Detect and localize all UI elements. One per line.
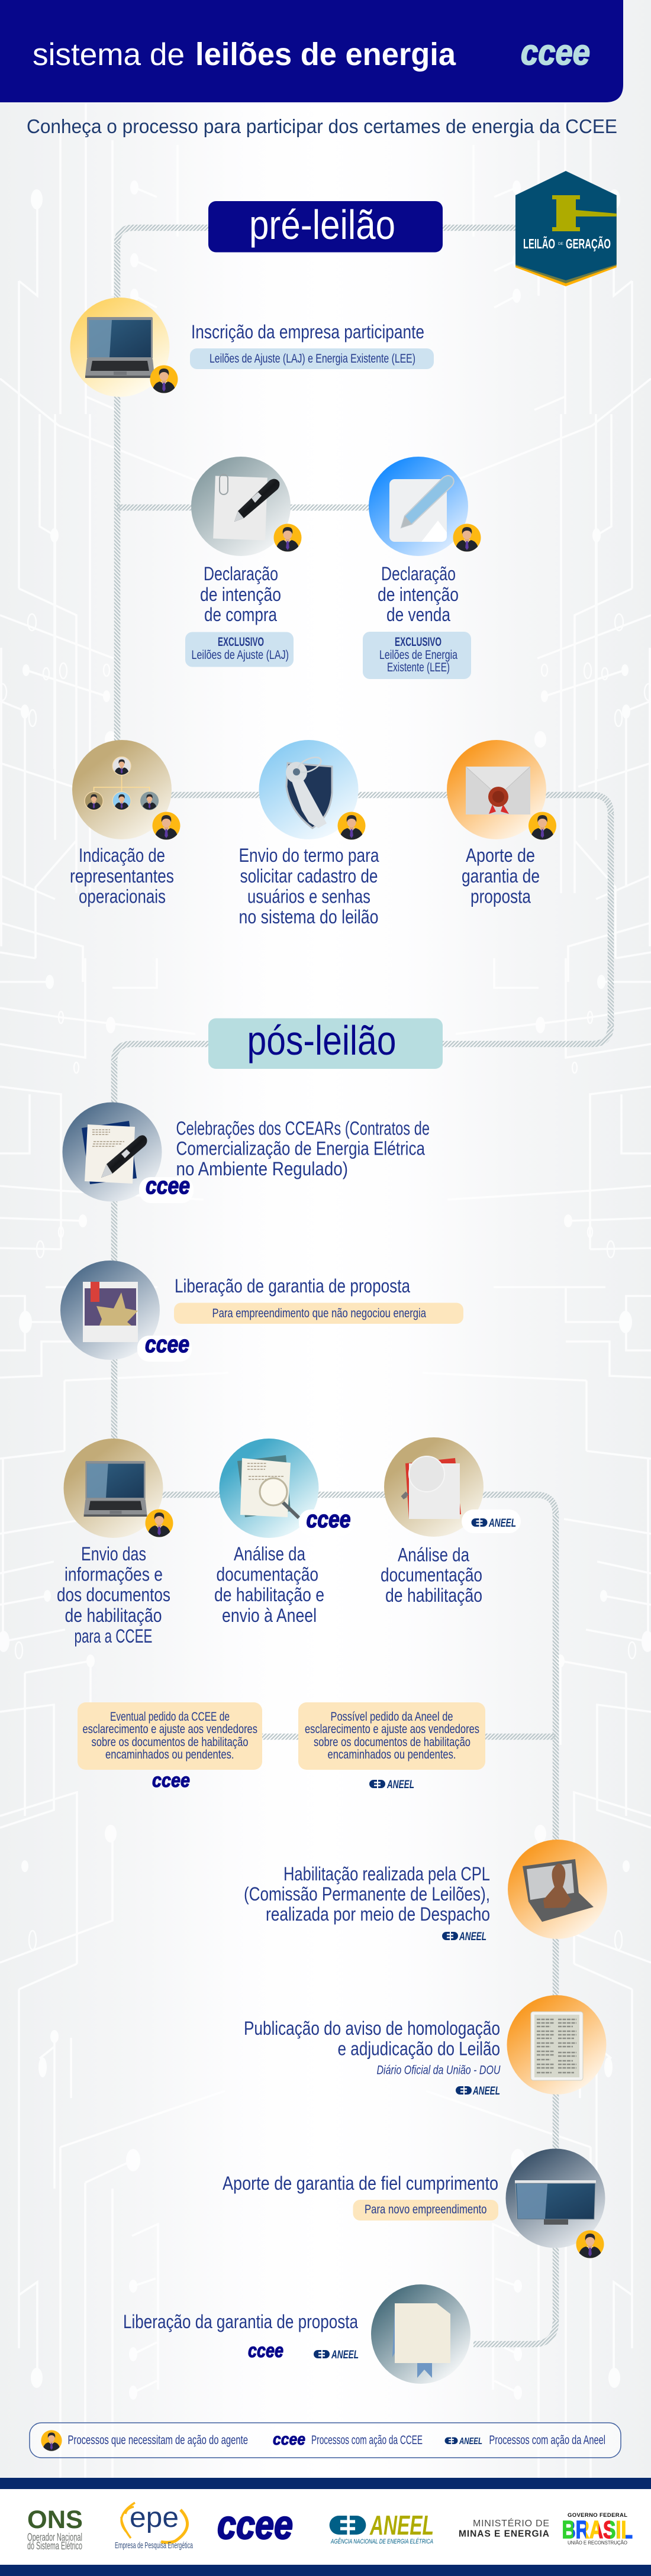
logo: EPE	[115, 2502, 193, 2551]
step: envio das informações	[57, 1439, 173, 1647]
label: Declaração	[204, 563, 278, 584]
step: declaração de venda: EXCLUSIVO	[395, 635, 441, 649]
logo: aneel	[462, 1510, 521, 1533]
icon: agent	[528, 812, 556, 840]
header banner	[0, 0, 623, 102]
step: aporte de garantia de proposta: proposta	[470, 886, 531, 907]
logo: ONS: Operador Nacional	[27, 2532, 82, 2543]
logo: Ministério	[459, 2517, 549, 2539]
step: aporte de fiel cumprimento: Para novo empreendimento	[365, 2203, 486, 2216]
logo: Ministério: MINAS E ENERGIA	[459, 2529, 549, 2539]
icon: key and shield	[286, 754, 332, 828]
icon: agent	[146, 1510, 173, 1537]
step: análise Aneel	[381, 1437, 521, 1606]
title: sistema de	[33, 37, 185, 72]
callout: pedido da CCEE: sobre os documentos de habilitação	[91, 1735, 249, 1749]
step: liberação de garantia: Para empreendimento que não negociou energia	[212, 1307, 426, 1320]
label: Habilitação realizada pela CPL	[283, 1863, 490, 1885]
legend item: agente: Processos que necessitam de ação do agente	[67, 2433, 248, 2447]
label: Análise da	[234, 1543, 305, 1565]
subtitle: Conheça o processo para participar dos certames de energia da CCEE	[27, 115, 617, 137]
heading: pré-leilão	[208, 201, 443, 252]
icon: agent	[453, 524, 481, 552]
step: declaração de venda: Existente (LEE)	[387, 661, 450, 674]
step: declaração de venda: Leilões de Energia	[379, 648, 457, 662]
logo: aneel	[442, 1930, 486, 1943]
step: inscrição	[70, 298, 434, 397]
logo: ccee: ccee	[152, 1769, 190, 1791]
step: envio do termo: usuários e senhas	[247, 886, 370, 907]
step: declaração de venda	[363, 457, 481, 679]
step: análise e envio à Aneel: de habilitação e	[214, 1584, 324, 1605]
icon: sealed envelope	[466, 767, 530, 815]
logo: Governo Federal: GOVERNO FEDERAL	[568, 2512, 627, 2519]
logo: ccee	[137, 1331, 192, 1362]
logo: EPE: epe	[130, 2502, 179, 2533]
step: inscrição: Leilões de Ajuste (LAJ) e Energia Existente (LEE)	[210, 352, 415, 366]
heading: pós-leilão: pós-leilão	[247, 1017, 397, 1064]
icon: org chart	[85, 757, 159, 810]
connector lines	[114, 228, 611, 2344]
step: envio das informações: dos documentos	[57, 1584, 170, 1605]
callout: pedido da CCEE: encaminhados ou pendentes.	[105, 1748, 234, 1761]
step: declaração de compra	[185, 457, 302, 667]
callout: pedido da Aneel: sobre os documentos de habilitação	[314, 1735, 470, 1749]
footer	[0, 2478, 651, 2576]
step: indicação de representantes: operacionais	[79, 886, 166, 907]
icon: agent	[337, 812, 366, 840]
logo: ONS: ONS	[27, 2506, 83, 2534]
step: aporte de garantia de proposta	[447, 740, 556, 907]
legend item: CCEE: ccee	[273, 2430, 305, 2448]
note pill	[363, 632, 471, 679]
label: Indicação de	[79, 845, 165, 866]
logo: ONS	[27, 2506, 83, 2552]
logo: aneel	[456, 2084, 500, 2097]
note pill	[174, 1302, 463, 1324]
badge: leilão de geração: GERAÇÃO	[566, 235, 611, 251]
icon: agent	[273, 524, 302, 552]
logo: ccee header: ccee	[521, 33, 590, 72]
step: análise e envio à Aneel: documentação	[217, 1564, 318, 1585]
logo: Ministério: MINISTÉRIO DE	[473, 2517, 549, 2529]
icon: paper and pen	[213, 474, 279, 541]
icon: agent	[150, 366, 178, 393]
logo: aneel	[369, 1778, 414, 1791]
icon: stamp	[523, 1859, 594, 1922]
legend	[30, 2423, 621, 2458]
heading: pré-leilão: pré-leilão	[249, 202, 395, 248]
step: aporte de fiel cumprimento	[223, 2148, 605, 2258]
logo: EPE: Empresa de Pesquisa Energética	[115, 2541, 193, 2551]
step: declaração de compra: Leilões de Ajuste (LAJ)	[192, 648, 289, 662]
legend item: agente	[41, 2430, 248, 2451]
icon: monitor	[515, 2180, 596, 2225]
icon: document and magnifier	[237, 1455, 299, 1518]
logo: ccee: ccee	[248, 2339, 283, 2361]
logo: aneel: ANEEL	[386, 1778, 414, 1791]
step: indicação de representantes	[70, 740, 180, 907]
icon: contract and pen	[82, 1121, 147, 1184]
label: Envio do termo para	[239, 845, 379, 866]
step: aporte de garantia de proposta: garantia de	[462, 865, 540, 887]
logo: aneel: ANEEL	[472, 2084, 500, 2097]
step: envio do termo	[239, 740, 379, 927]
icon: document and magnifier	[402, 1456, 461, 1519]
logo: Governo Federal: UNIÃO E RECONSTRUÇÃO	[568, 2540, 627, 2546]
callout: pedido da Aneel: esclarecimento e ajuste aos vendedores	[305, 1722, 479, 1736]
step: declaração de venda: de intenção	[378, 584, 459, 605]
logo: ANEEL	[330, 2510, 434, 2545]
label: Liberação da garantia de proposta	[123, 2311, 358, 2332]
badge: leilão de geração: DE	[558, 243, 563, 246]
step: declaração de venda: de venda	[386, 604, 450, 625]
label: Declaração	[381, 563, 456, 584]
note pill	[353, 2200, 498, 2221]
step: publicação: e adjudicação do Leilão	[337, 2038, 500, 2060]
note pill	[190, 348, 434, 369]
logo: aneel: ANEEL	[459, 1930, 486, 1943]
label: Análise da	[398, 1544, 469, 1565]
step: celebrações dos CCEARs	[63, 1103, 430, 1203]
step: análise Aneel: documentação	[381, 1564, 482, 1585]
step: declaração de compra: de compra	[204, 604, 277, 625]
label: Inscrição da empresa participante	[191, 321, 424, 342]
step: análise e envio à Aneel	[214, 1439, 353, 1626]
logo: CCEE: ccee	[217, 2502, 293, 2548]
step: liberação de garantia	[60, 1260, 463, 1362]
step: declaração de compra: EXCLUSIVO	[218, 635, 264, 649]
label: Aporte de garantia de fiel cumprimento	[223, 2173, 498, 2194]
callout: pedido da Aneel: Possível pedido da Aneel de	[330, 1710, 453, 1724]
logo: Governo Federal	[562, 2512, 633, 2546]
step: liberação da garantia	[123, 2284, 470, 2384]
step: publicação	[244, 1995, 606, 2097]
step: habilitação: (Comissão Permanente de Leilões),	[244, 1883, 490, 1905]
step: habilitação	[244, 1840, 607, 1943]
legend item: CCEE	[273, 2430, 423, 2448]
logo: aneel: ANEEL	[331, 2348, 359, 2361]
logo: ccee: ccee	[146, 1173, 190, 1199]
step: habilitação: realizada por meio de Despacho	[266, 1903, 490, 1925]
logo: ONS: do Sistema Elétrico	[27, 2540, 82, 2552]
step: envio das informações: para a CCEE	[75, 1625, 153, 1647]
icon: laptop	[84, 1461, 147, 1517]
step: análise e envio à Aneel: envio à Aneel	[222, 1605, 317, 1626]
legend item: Aneel: ANEEL	[459, 2436, 482, 2446]
heading: pós-leilão	[208, 1017, 443, 1069]
icon: agent	[576, 2230, 604, 2258]
step: indicação de representantes: representantes	[70, 865, 174, 887]
step: envio das informações: informações e	[65, 1564, 163, 1585]
badge: leilão de geração	[515, 171, 617, 286]
icon: gavel	[552, 195, 617, 231]
icon: newspaper	[531, 2012, 583, 2080]
icon: laptop	[85, 317, 154, 378]
label: Liberação de garantia de proposta	[175, 1275, 410, 1297]
callout: pedido da CCEE	[78, 1702, 262, 1791]
callout: pedido da CCEE: Eventual pedido da CCEE de	[110, 1710, 230, 1724]
logo: aneel: ANEEL	[488, 1517, 516, 1530]
label: Celebrações dos CCEARs (Contratos de	[176, 1118, 430, 1139]
icon: agent	[153, 812, 180, 840]
callout: pedido da Aneel: encaminhados ou pendentes.	[328, 1748, 456, 1761]
step: declaração de compra: de intenção	[200, 584, 281, 605]
step: análise Aneel: de habilitação	[385, 1585, 482, 1606]
label: Aporte de	[466, 845, 535, 866]
logo: ANEEL: AGÊNCIA NACIONAL DE ENERGIA ELÉTRICA	[330, 2538, 433, 2545]
step: envio do termo: solicitar cadastro de	[240, 865, 378, 887]
step: celebrações dos CCEARs: no Ambiente Regulado)	[176, 1158, 348, 1179]
badge: leilão de geração: LEILÃO	[523, 235, 555, 251]
step: envio do termo: no sistema do leilão	[239, 906, 379, 927]
icon: box with star	[83, 1282, 138, 1342]
callout: pedido da CCEE: esclarecimento e ajuste aos vendedores	[83, 1722, 257, 1736]
icon: certificate	[392, 2303, 450, 2378]
icon: notebook and pen	[389, 476, 454, 542]
logo: aneel	[314, 2348, 359, 2361]
label: Publicação do aviso de homologação	[244, 2018, 500, 2039]
source note: Diário Oficial da União - DOU	[376, 2063, 501, 2077]
step: envio das informações: de habilitação	[65, 1605, 162, 1626]
label: Envio das	[81, 1543, 146, 1565]
legend item: Aneel	[445, 2433, 605, 2447]
header banner: leilões de energia	[195, 37, 456, 72]
logo: ccee: ccee	[307, 1507, 350, 1533]
note pill	[185, 632, 294, 667]
logo: ccee: ccee	[145, 1331, 189, 1358]
legend item: CCEE: Processos com ação da CCEE	[311, 2433, 423, 2447]
callout: pedido da Aneel	[298, 1702, 485, 1791]
step: celebrações dos CCEARs: Comercialização de Energia Elétrica	[176, 1138, 425, 1159]
logo: ANEEL: ANEEL	[369, 2510, 434, 2541]
